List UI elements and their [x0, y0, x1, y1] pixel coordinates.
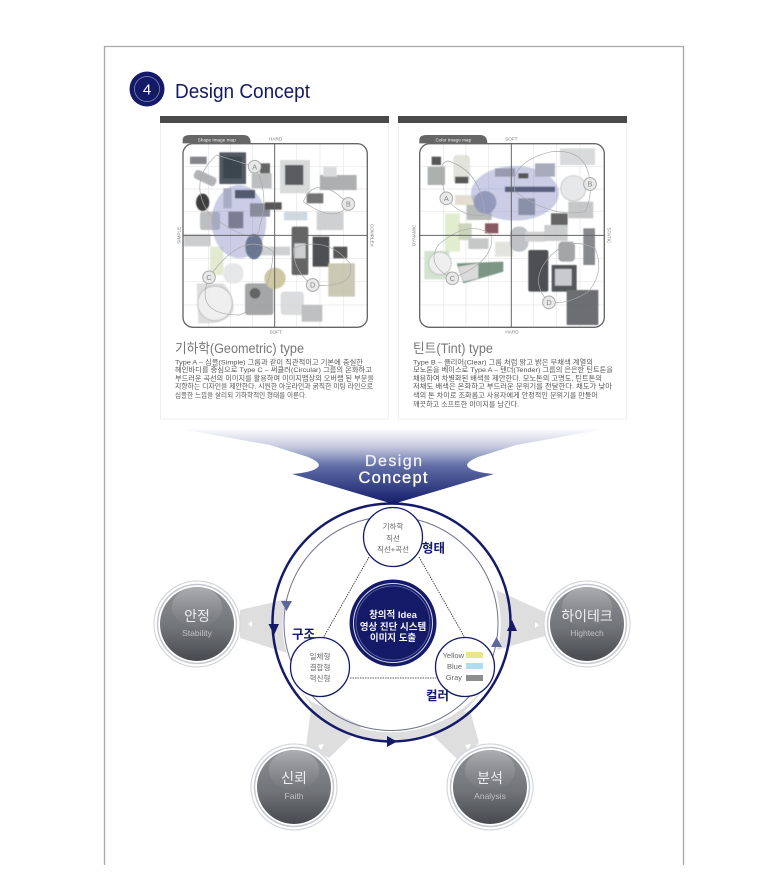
grey band between rings: [300, 690, 482, 741]
label: color: 컬러: [426, 689, 449, 703]
connector: analysis: [425, 710, 479, 760]
label: structure: 구조: [292, 628, 315, 642]
text: geometric description: 헤인바디를 중심으로 Type C – 써큘러(Circular) 그룹의 온화하고: [175, 365, 372, 374]
node: color: Blue: [447, 662, 462, 671]
panel: tint type: [398, 116, 627, 419]
color image map: D: [546, 298, 552, 307]
heading: geometric: 기하학(Geometric) type: [175, 341, 304, 356]
page frame: [104, 46, 684, 865]
shape image map: [177, 135, 375, 335]
title: Design Concept: [175, 81, 310, 103]
shape image map: HARD: [269, 136, 283, 141]
node: form: 직선: [386, 533, 400, 543]
shape image map: A: [252, 162, 257, 171]
text: geometric description: 심플한 느낌을 살리되 기하학적인 형태를 이룬다.: [175, 390, 307, 400]
value disc: hightech: 하이테크: [561, 608, 613, 624]
text: tint description: 모노톤을 베이스로 Type A – 텐더(Tender) 그룹의 은은한 틴트톤을: [413, 365, 613, 374]
value disc: hightech: [544, 581, 630, 667]
inner ring with arrows: [281, 516, 502, 730]
section number badge: [130, 72, 164, 106]
value disc: stability: Stability: [182, 628, 213, 638]
shape image map: C: [206, 273, 212, 282]
value disc: hightech: Hightech: [570, 628, 604, 638]
shape image map: D: [310, 281, 315, 290]
color image map: STATIC: [606, 227, 611, 244]
node: form: 직선+곡선: [377, 544, 409, 554]
node: form: [364, 508, 422, 566]
funnel arrow: Design Concept: Concept: [358, 469, 428, 487]
text: geometric description: Type A – 심플(Simple) 그룹과 같이 직관적이고 기본에 충실한: [175, 358, 363, 366]
color image map: [412, 135, 611, 335]
funnel arrow: Design Concept: Design: [365, 453, 422, 470]
text: geometric description: 부드러운 곡선의 이미지를 활용하여 이미지맵상의 오버랩 된 부분을: [175, 374, 374, 382]
text: geometric description: [175, 358, 374, 400]
text: tint description: 채용하여 차별화된 배색을 제안한다. 모노톤의 고명도, 틴트톤의: [413, 374, 602, 382]
funnel arrow: Design Concept: [175, 428, 611, 504]
node: color: Yellow: [443, 651, 465, 660]
text: geometric description: 지향하는 디자인을 제안한다. 시원한 아웃라인과 굵직한 미팅 라인으로: [175, 382, 373, 390]
connector: faith: [306, 702, 362, 758]
color image map: C: [450, 274, 456, 283]
outer ring with arrows: [268, 504, 517, 747]
color image map: A: [444, 194, 449, 203]
node: color: [436, 638, 494, 696]
text: tint description: Type B – 클리어(Clear) 그룹 처럼 맑고 밝은 무채색 계열의: [413, 358, 593, 366]
value disc: analysis: 분석: [477, 770, 503, 786]
panel: geometric type: [160, 116, 389, 419]
connector: hightech: [496, 590, 545, 650]
shape image map: Shape Image map: [198, 138, 236, 143]
heading: tint: 틴트(Tint) type: [413, 341, 493, 356]
value disc: faith: Faith: [285, 791, 304, 801]
shape image map: B: [346, 200, 351, 209]
text: tint description: 저채도 배색은 온화하고 부드러운 분위기를 전달한다. 채도가 낮아: [413, 382, 612, 390]
core circle: [350, 580, 436, 666]
value disc: stability: 안정: [184, 608, 210, 624]
node: color: Gray: [446, 673, 462, 682]
shape image map: COMPLEX: [370, 224, 375, 248]
value disc: analysis: Analysis: [474, 791, 506, 801]
color image map: Color Image map: [435, 138, 472, 143]
core circle: 영상 진단 시스템: [360, 621, 426, 633]
label: form: 형태: [422, 540, 445, 556]
core circle: 이미지 도출: [370, 632, 416, 644]
node: structure: 혁신형: [310, 674, 330, 683]
section number badge: 4: [143, 82, 151, 98]
node: structure: [290, 638, 350, 696]
core circle: 창의적 Idea: [369, 609, 418, 621]
value disc: analysis: [447, 744, 533, 830]
node: structure: 일체형: [310, 651, 330, 661]
color image map: DYNAMIC: [412, 224, 417, 246]
value disc: faith: 신뢰: [281, 770, 307, 786]
text: tint description: 색의 톤 차이로 조화롭고 사용자에게 안정적인 분위기를 만들어: [413, 390, 598, 400]
connector: stability: [240, 599, 287, 653]
node: structure: 결합형: [310, 662, 330, 672]
dotted triangle: [322, 557, 465, 678]
value disc: faith: [251, 744, 337, 830]
text: tint description: [413, 358, 613, 408]
color image map: SOFT: [505, 136, 518, 141]
value disc: stability: [154, 581, 240, 667]
shape image map: SOFT: [269, 330, 282, 335]
color image map: HARD: [505, 330, 519, 335]
shape image map: SIMPLE: [177, 227, 182, 244]
text: tint description: 깨끗하고 소프트한 이미지를 남긴다.: [413, 400, 519, 408]
color image map: B: [588, 180, 593, 189]
node: form: 기하학: [383, 521, 403, 531]
